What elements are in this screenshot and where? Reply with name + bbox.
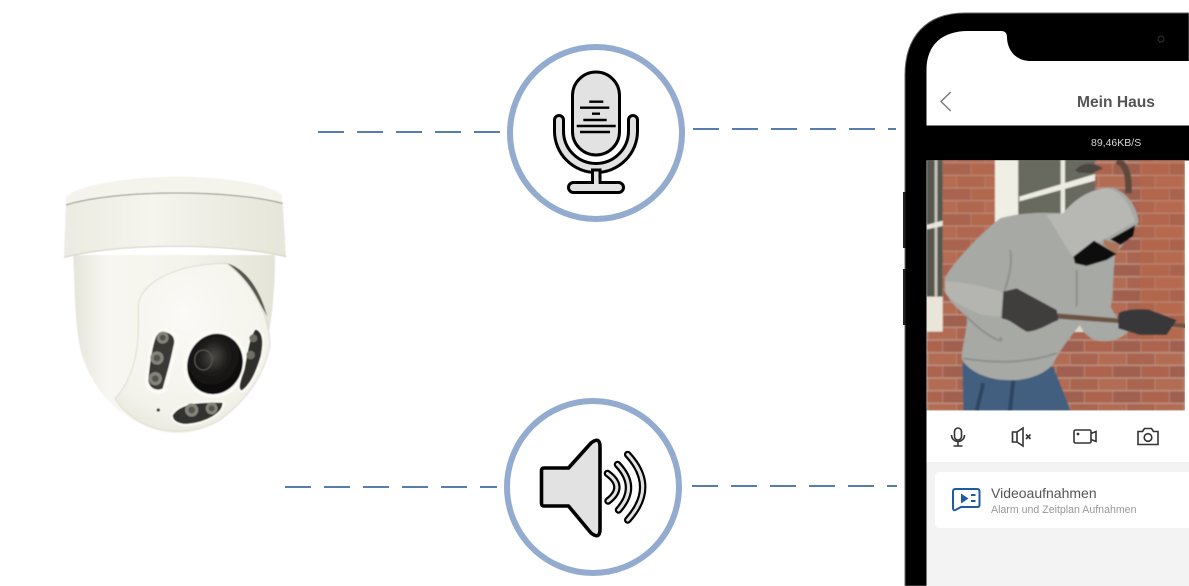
icon: toolbar muted speaker <box>1012 428 1030 446</box>
camera left infrared array <box>145 328 179 394</box>
stream speed bar <box>926 126 1189 160</box>
live video photo: burglar at window <box>927 160 1187 411</box>
dashed line: camera to speaker <box>285 486 497 488</box>
camera mount lid <box>66 177 283 205</box>
icon: speaker <box>542 440 643 536</box>
camera microphone hole <box>157 408 160 412</box>
camera dome body <box>73 255 275 433</box>
speaker badge <box>507 401 679 573</box>
camera bottom infrared array <box>172 402 223 425</box>
lower screen background <box>926 462 1189 586</box>
screen title: Mein Haus <box>1077 94 1155 111</box>
dashed line: speaker to phone <box>692 485 897 487</box>
stream speed bar: 89,46KB/S <box>1091 137 1141 149</box>
camera ball housing <box>115 263 270 431</box>
icon: toolbar snapshot camera <box>1138 428 1158 444</box>
icon: video recordings <box>953 489 980 510</box>
camera <box>64 177 286 433</box>
camera lens <box>173 321 257 407</box>
icon: toolbar video record <box>1074 430 1096 443</box>
dashed line: microphone to phone <box>693 128 896 130</box>
phone front camera <box>1158 36 1164 42</box>
card title: Videoaufnahmen <box>991 485 1097 501</box>
card subtitle: Alarm und Zeitplan Aufnahmen <box>991 504 1137 516</box>
icon: microphone <box>559 72 633 192</box>
phone side buttons <box>903 192 906 325</box>
camera right infrared array <box>239 328 263 392</box>
camera shadow wedge <box>225 263 267 317</box>
dashed line: camera to microphone <box>318 131 500 133</box>
microphone badge <box>510 47 682 219</box>
badge ring <box>507 401 679 573</box>
phone screen <box>926 31 1189 586</box>
camera mount band <box>64 192 286 257</box>
toolbar <box>926 411 1189 462</box>
icon: toolbar microphone <box>952 428 964 446</box>
badge ring <box>510 47 682 219</box>
phone <box>903 13 1189 586</box>
video recordings card <box>935 472 1189 528</box>
back chevron <box>941 92 951 111</box>
phone body <box>905 13 1189 586</box>
